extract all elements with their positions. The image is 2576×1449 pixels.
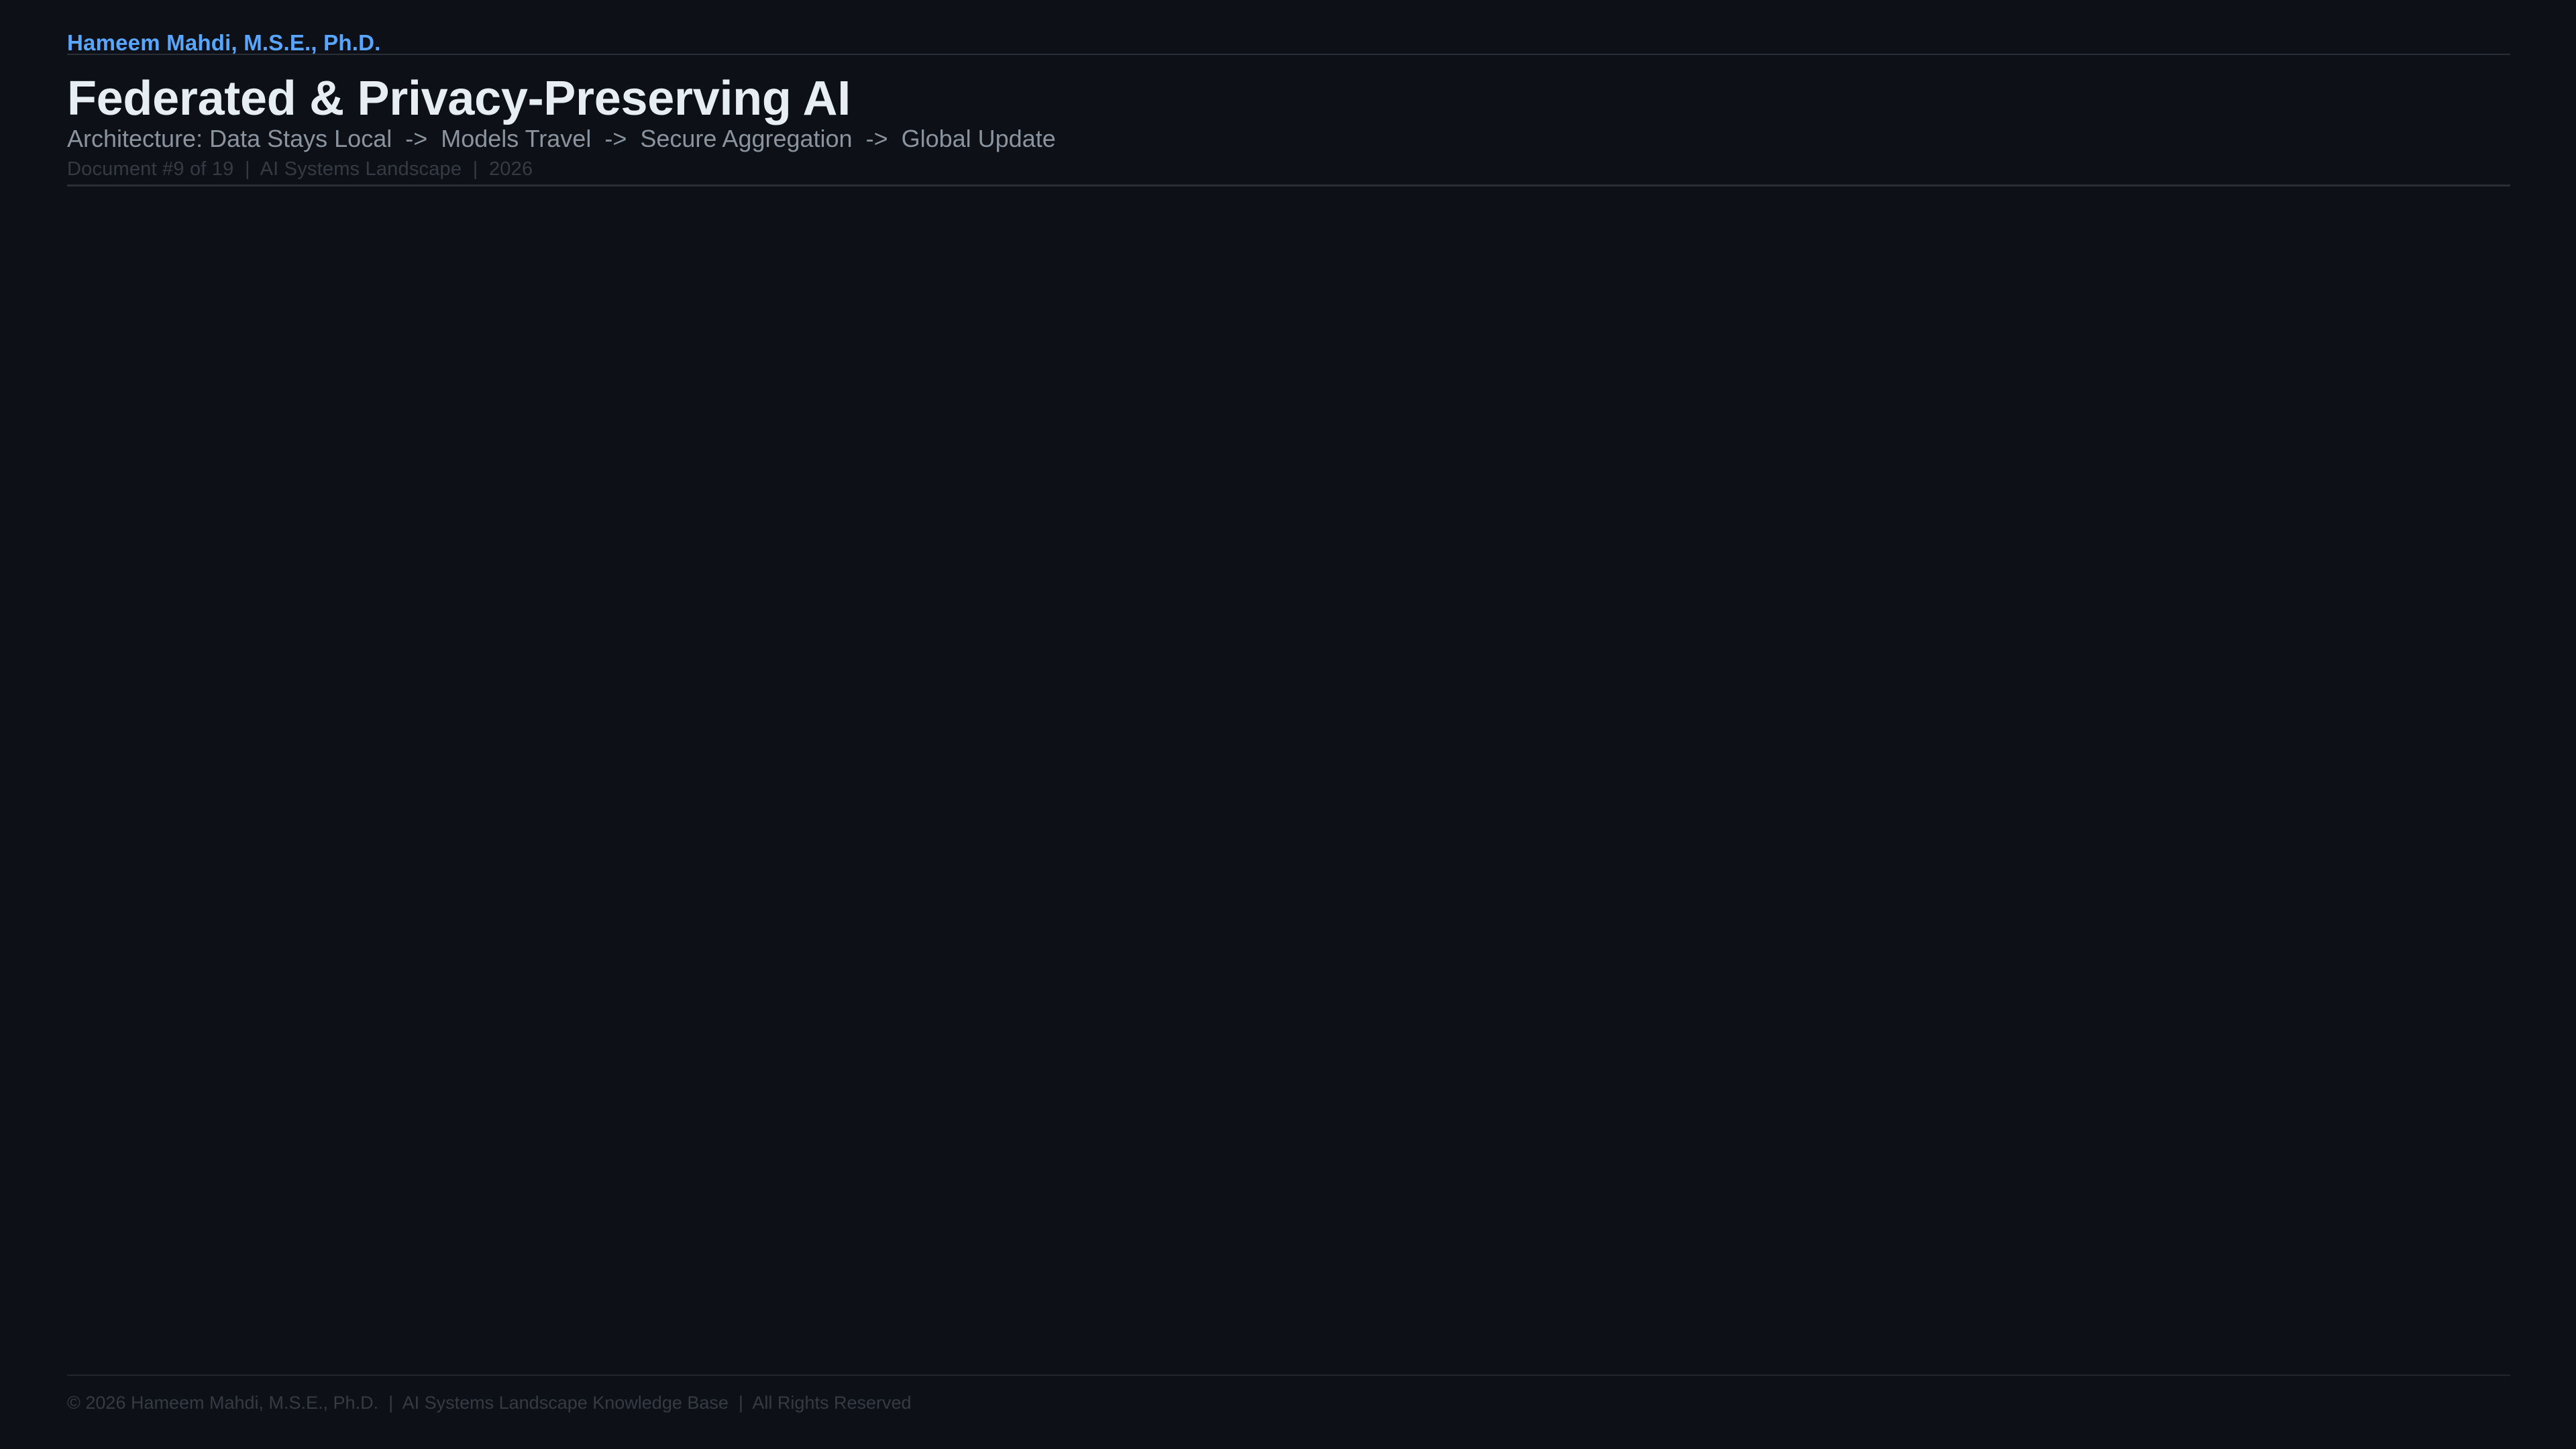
document meta line: Document #9 of 19 | AI Systems Landscape | 2026 [67, 158, 533, 180]
footer: © 2026 Hameem Mahdi, M.S.E., Ph.D. | AI Systems Landscape Knowledge Base | All Rights Reserved [67, 1393, 912, 1413]
title: Federated & Privacy-Preserving AI [67, 72, 851, 125]
author name: Hameem Mahdi, M.S.E., Ph.D. [67, 30, 381, 55]
subtitle: Architecture: Data Stays Local -> Models Travel -> Secure Aggregation -> Global Update [67, 125, 1056, 152]
